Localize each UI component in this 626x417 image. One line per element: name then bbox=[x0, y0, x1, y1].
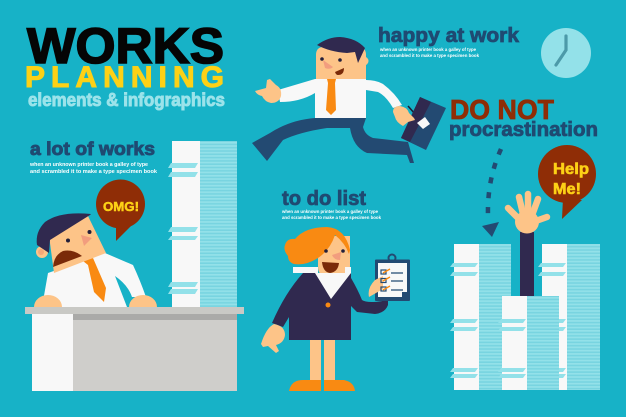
title: elements & infographics bbox=[28, 90, 225, 110]
heading: to do list bbox=[281, 188, 381, 221]
heading: to do list: when an unknown printer book a galley of type bbox=[281, 209, 378, 215]
arrow: dashed curve bbox=[482, 149, 501, 237]
heading: do not procrastination: DO NOT bbox=[450, 94, 554, 125]
heading: to do list: and scrambled it to make a type specimen book bbox=[282, 215, 381, 221]
heading: a lot of works bbox=[29, 138, 157, 175]
speech bubble: help me bbox=[538, 145, 596, 219]
heading: do not procrastination bbox=[449, 94, 598, 141]
desk bbox=[25, 307, 244, 391]
heading: to do list: to do list bbox=[282, 188, 366, 210]
heading: happy at work bbox=[378, 24, 520, 58]
speech bubble: OMG: OMG! bbox=[103, 200, 139, 214]
heading: a lot of works: and scrambled it to make a type specimen book bbox=[30, 169, 157, 175]
speech bubble: OMG bbox=[96, 180, 145, 241]
heading: happy at work: and scrambled it to make a type specimen book bbox=[380, 53, 479, 58]
paper stack: desk pile bbox=[168, 141, 237, 307]
heading: do not procrastination: procrastination bbox=[449, 119, 598, 141]
icon: clock bbox=[541, 28, 591, 78]
title: WORKS bbox=[27, 18, 224, 74]
paper stack: right pile bbox=[538, 244, 600, 390]
title bbox=[25, 18, 225, 110]
paper stack: left pile bbox=[450, 244, 511, 390]
character: running man with briefcase bbox=[252, 37, 446, 163]
title: PLANNING bbox=[25, 61, 224, 94]
speech bubble: help me: Help bbox=[553, 161, 589, 178]
heading: a lot of works: a lot of works bbox=[30, 138, 155, 159]
speech bubble: help me: Me! bbox=[553, 181, 581, 198]
raised arm and hand bbox=[508, 194, 547, 297]
heading: happy at work: happy at work bbox=[378, 24, 520, 47]
heading: a lot of works: when an unknown printer book a galley of type bbox=[29, 162, 148, 168]
paper stack: middle pile bbox=[498, 296, 559, 390]
character: stressed man at desk bbox=[34, 213, 157, 307]
character: woman with clipboard bbox=[261, 227, 410, 391]
heading: happy at work: when an unknown printer book a galley of type bbox=[379, 47, 476, 52]
